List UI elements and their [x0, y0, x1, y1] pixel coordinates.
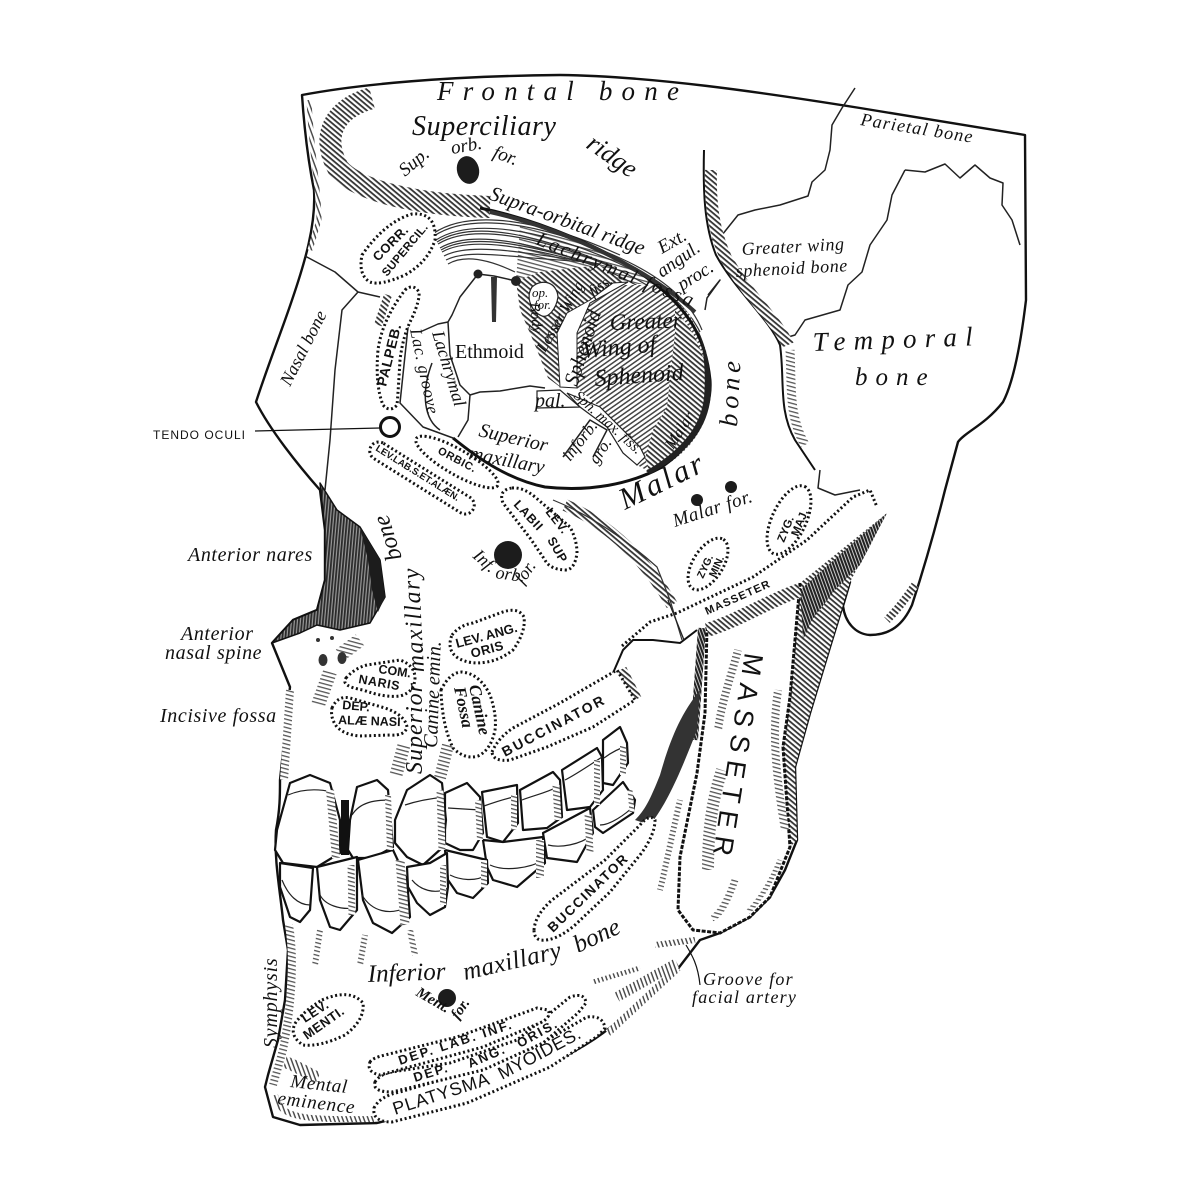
brow and edge shading — [273, 98, 695, 1119]
side labels: TENDO OCULI — [153, 428, 246, 442]
foramina — [438, 154, 737, 1007]
bone labels: for. — [448, 996, 473, 1022]
canine fossa label — [450, 683, 494, 737]
orbit labels: Sph. max. fiss. — [570, 388, 645, 458]
lower teeth — [280, 782, 635, 933]
lachrymal groove curves — [425, 363, 440, 430]
orbit roof hatch — [516, 225, 702, 330]
orbit labels: gro. — [585, 434, 616, 467]
muscle labels: ZYG. — [776, 515, 797, 544]
orbit labels — [406, 272, 699, 479]
body and lesser wing shading — [516, 265, 625, 387]
dark crescent — [646, 330, 711, 474]
muscle attachments — [293, 214, 820, 1122]
bone labels: orb. — [449, 133, 484, 159]
bone labels: sphenoid bone — [735, 255, 848, 281]
bone labels — [275, 76, 981, 1022]
muscle labels: SUPERCIL. — [380, 221, 431, 279]
bone labels: Inf. — [469, 544, 501, 576]
orbit labels: Lesser Wing — [533, 278, 588, 356]
muscle labels: COM. — [378, 662, 412, 681]
orbit labels: for. — [534, 297, 551, 312]
bone labels: Sup. — [395, 143, 434, 181]
orbit labels: Wing of — [581, 331, 661, 364]
muscle labels: DEP. — [342, 698, 370, 714]
mandibular ramus — [635, 513, 887, 933]
side labels: Anterior nares — [186, 544, 313, 566]
side labels: Anterior — [179, 623, 254, 645]
nasal aperture — [272, 483, 385, 643]
skull outline — [256, 75, 1026, 1125]
ethmoid foramina — [474, 270, 521, 286]
orbit labels: fiss. — [586, 272, 616, 300]
muscle labels: LEV.LAB.S.ET.ALÆN. — [373, 443, 461, 504]
muscle labels: DEP. LAB. INF. — [396, 1016, 515, 1068]
bone labels: Superciliary — [412, 111, 557, 142]
orbit labels: Lachrymal — [428, 327, 470, 409]
greater wing shading — [577, 285, 710, 472]
masseter insertion — [678, 583, 800, 933]
bone labels: bone — [714, 355, 747, 427]
muscle labels: LEV. ANG. — [454, 620, 519, 651]
maxilla and zygomatic arch — [610, 490, 877, 700]
condyle neck dark — [800, 513, 887, 640]
muscle labels: MAJ. — [790, 508, 811, 538]
masseter hatching — [660, 590, 800, 918]
orbit labels: Sphenoid — [559, 306, 606, 389]
bone labels: Lachrymal fossa — [532, 228, 699, 312]
muscle labels: DEP. — [411, 1060, 451, 1085]
bone labels: bone — [569, 913, 625, 958]
side labels — [153, 428, 797, 1118]
orbit labels: Greater — [609, 307, 683, 335]
side labels: eminence — [276, 1088, 357, 1118]
bone labels: bone — [855, 364, 936, 391]
bone labels: maxillary — [460, 937, 564, 986]
bone labels: Inferior — [366, 958, 446, 988]
bone labels: ridge — [582, 128, 643, 183]
muscle labels: CORR. — [370, 222, 412, 264]
cranial sutures — [305, 88, 1020, 495]
muscle labels: ANG. — [465, 1041, 508, 1071]
bone labels: Malar — [612, 444, 711, 517]
muscle labels: BUCCINATOR — [545, 850, 632, 935]
orbit labels: pal. — [533, 390, 566, 412]
groove leader — [686, 945, 700, 985]
side labels: Mental — [288, 1071, 349, 1098]
muscle labels: LEV. — [298, 997, 332, 1026]
orbit labels: Malar — [662, 409, 699, 453]
palatal piece — [537, 390, 580, 408]
bone labels: Frontal bone — [436, 76, 688, 106]
muscle labels: LEV. — [543, 505, 572, 537]
side labels: nasal spine — [165, 642, 262, 664]
ethmoid slit — [491, 277, 497, 322]
muscle labels: BUCCINATOR — [499, 691, 609, 760]
muscle labels: ORBIC. — [436, 445, 478, 475]
bone labels: angul. — [653, 237, 704, 282]
bone labels: maxillary — [399, 566, 430, 673]
orbit labels: Body — [526, 302, 545, 334]
bone labels: Superior — [402, 682, 428, 774]
sphenoid fissure strip — [557, 282, 628, 388]
dark ridge — [490, 212, 695, 312]
temporal edge shading — [704, 150, 915, 620]
muscle labels: MIN. — [707, 554, 727, 579]
orbit — [400, 208, 711, 488]
bone labels: Temporal — [812, 321, 981, 357]
bone labels: for. — [510, 557, 540, 587]
bone labels: Malar for. — [669, 486, 756, 532]
bone labels: Ment. — [412, 984, 452, 1017]
ramus hatching behind insertion — [783, 513, 887, 847]
muscle labels: MENTI. — [300, 1003, 347, 1042]
muscle labels: MASSETER — [703, 578, 773, 618]
side labels: Incisive fossa — [159, 705, 277, 727]
bone labels: for. — [490, 142, 521, 170]
bone labels: Greater wing — [741, 234, 845, 259]
muscle labels: ALÆ NASI — [338, 713, 401, 729]
muscle labels: NARIS — [357, 672, 401, 693]
bone labels: bone — [368, 511, 408, 564]
muscle labels: MASSETER — [706, 651, 769, 866]
upper teeth — [275, 727, 628, 867]
incisive pits — [316, 636, 346, 666]
muscle labels: LABII — [511, 497, 546, 534]
muscle labels: ZYG. — [695, 553, 716, 580]
orbit labels: inforb. — [558, 417, 601, 464]
muscle labels: MYOIDES. — [494, 1023, 584, 1084]
tendo oculi leader — [255, 428, 380, 431]
bone labels: Canine emin. — [420, 641, 446, 748]
orbit labels: Lac. groove — [406, 326, 443, 416]
muscle labels: SUP — [544, 534, 570, 565]
orbit labels: op. — [532, 285, 548, 300]
muscle labels — [298, 221, 811, 1119]
muscle labels: ORIS — [469, 638, 505, 661]
tooth shading — [315, 745, 632, 965]
bone labels: Nasal bone — [275, 307, 331, 390]
bone labels: orb. — [494, 562, 526, 586]
side labels: Symphysis — [260, 957, 282, 1048]
side labels: Groove for — [703, 969, 794, 989]
canine fossa label: Canine — [465, 683, 494, 737]
orbit labels: Superior — [477, 419, 550, 457]
bone labels: proc. — [672, 257, 718, 296]
ethmoid sutures — [448, 274, 478, 437]
canine fossa label: Fossa — [450, 684, 477, 730]
spheno-maxillary fissure — [567, 393, 645, 465]
orbit rim — [453, 208, 710, 488]
muscle labels: PALPEB. — [373, 322, 404, 388]
ramus front dark edge — [635, 690, 700, 825]
lateral orbit band — [645, 310, 710, 474]
orbit labels: Ethmoid — [455, 341, 524, 363]
bone labels: Ext. — [653, 225, 691, 259]
bone labels: Supra-orbital ridge — [486, 181, 649, 260]
side labels: facial artery — [692, 987, 797, 1007]
optic foramen — [529, 282, 558, 316]
nasal aperture dark edge — [360, 527, 385, 612]
orbit roof lines — [434, 220, 702, 337]
bone labels: Parietal bone — [858, 109, 975, 147]
muscle labels: PLATYSMA — [390, 1069, 492, 1119]
orbit labels: Sphenoid — [594, 360, 686, 392]
orbit labels: maxillary — [467, 442, 547, 479]
muscle labels: ORIS. — [514, 1015, 561, 1051]
